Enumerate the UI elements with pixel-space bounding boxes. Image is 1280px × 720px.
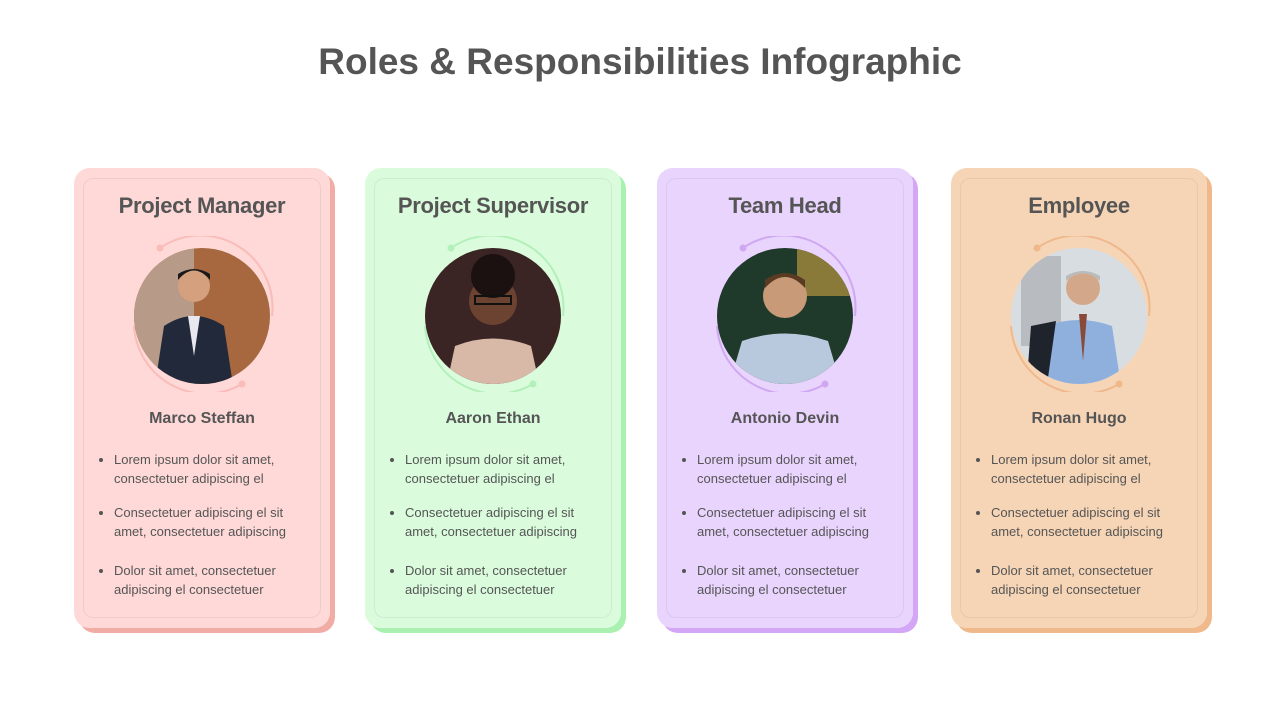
bullet list <box>390 452 577 597</box>
name: Ronan Hugo <box>1031 410 1127 427</box>
heading: employee: Employee <box>1028 193 1130 218</box>
heading: team head: Team Head <box>728 193 842 218</box>
bullet list: Lorem ipsum dolor sit amet, consectetuer adipiscing el <box>991 452 1151 486</box>
bullet list: Dolor sit amet, consectetuer adipiscing el consectetuer <box>991 563 1153 597</box>
panel: team head <box>657 168 913 628</box>
photo: antonio <box>716 236 856 392</box>
bullet list <box>682 452 869 597</box>
bullet list: Consectetuer adipiscing el sit amet, consectetuer adipiscing <box>991 505 1163 539</box>
bullet list: Dolor sit amet, consectetuer adipiscing el consectetuer <box>405 563 567 597</box>
name: Marco Steffan <box>149 410 255 427</box>
bullet list: Consectetuer adipiscing el sit amet, consectetuer adipiscing <box>114 505 286 539</box>
name: Aaron Ethan <box>445 410 541 427</box>
photo: marco <box>133 236 274 392</box>
heading: project supervisor: Project Supervisor <box>398 193 588 218</box>
bullet list: Lorem ipsum dolor sit amet, consectetuer adipiscing el <box>405 452 565 486</box>
panel: project supervisor <box>365 168 621 628</box>
bullet list: Lorem ipsum dolor sit amet, consectetuer adipiscing el <box>114 452 274 486</box>
bullet list <box>976 452 1163 597</box>
photo: aaron <box>424 236 564 392</box>
bullet list <box>99 452 286 597</box>
heading: project manager: Project Manager <box>119 193 285 218</box>
bullet list: Consectetuer adipiscing el sit amet, consectetuer adipiscing <box>697 505 869 539</box>
bullet list: Dolor sit amet, consectetuer adipiscing el consectetuer <box>697 563 859 597</box>
name: Antonio Devin <box>731 410 839 427</box>
title: Roles & Responsibilities Infographic <box>318 41 962 82</box>
panel: employee <box>951 168 1207 628</box>
bullet list: Lorem ipsum dolor sit amet, consectetuer adipiscing el <box>697 452 857 486</box>
panel: project manager <box>74 168 330 628</box>
photo: ronan <box>1010 236 1150 392</box>
bullet list: Consectetuer adipiscing el sit amet, consectetuer adipiscing <box>405 505 577 539</box>
bullet list: Dolor sit amet, consectetuer adipiscing el consectetuer <box>114 563 276 597</box>
